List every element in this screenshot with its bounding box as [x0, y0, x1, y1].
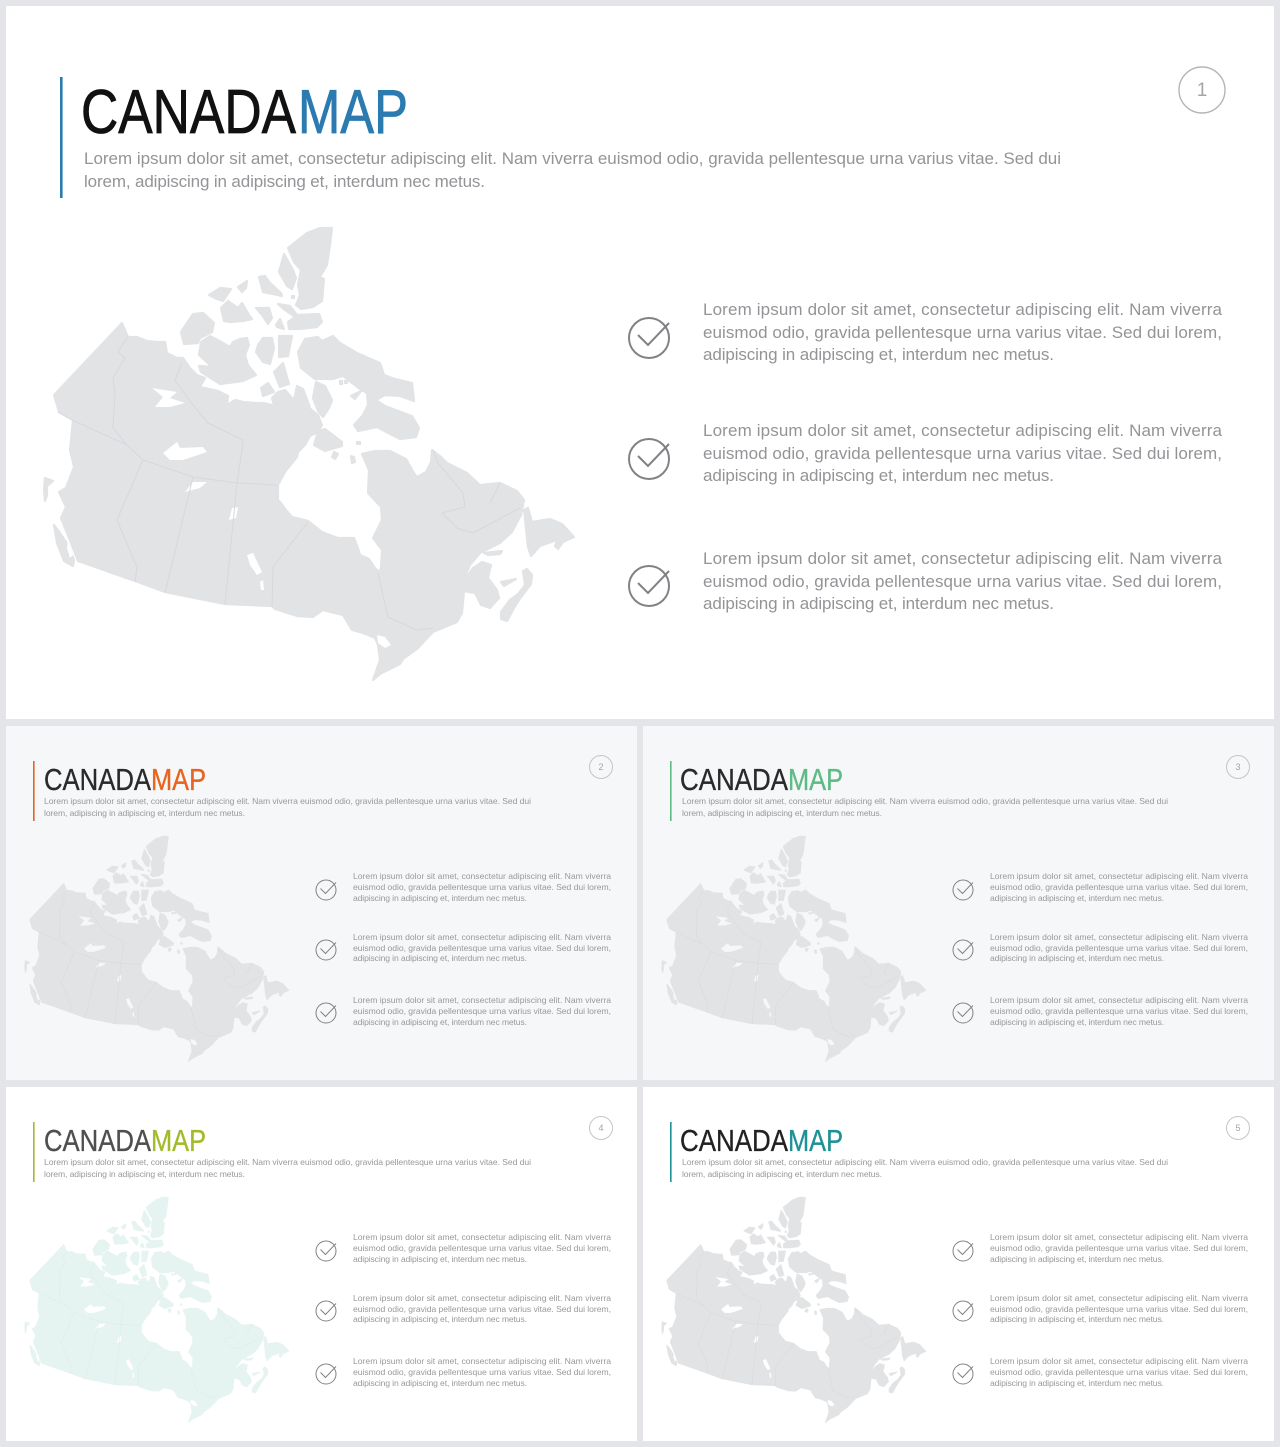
icon: check [316, 1003, 336, 1023]
text block: euismod odio, gravida pellentesque urna varius vitae. Sed dui lorem, [353, 1006, 611, 1016]
map of Canada [25, 836, 289, 1061]
page number badge [1226, 1116, 1250, 1140]
text block: adipiscing in adipiscing et, interdum nec metus. [353, 893, 527, 903]
text block: euismod odio, gravida pellentesque urna varius vitae. Sed dui lorem, [990, 943, 1248, 953]
icon: check [953, 880, 973, 900]
title: CANADA [680, 1123, 788, 1158]
icon: check 2 [629, 439, 669, 479]
text block 3: adipiscing in adipiscing et, interdum nec metus. [703, 594, 1054, 613]
title: CANADA [680, 762, 788, 797]
text block: Lorem ipsum dolor sit amet, consectetur adipiscing elit. Nam viverra [990, 1232, 1248, 1242]
title: CANADA [44, 1123, 151, 1158]
text block: Lorem ipsum dolor sit amet, consectetur adipiscing elit. Nam viverra [353, 1356, 611, 1366]
text block: euismod odio, gravida pellentesque urna varius vitae. Sed dui lorem, [353, 943, 611, 953]
intro text: Lorem ipsum dolor sit amet, consectetur adipiscing elit. Nam viverra euismod odio, gravida pellentesque urna varius vitae. Sed dui [682, 796, 1168, 806]
text block [353, 1293, 611, 1324]
text block 3: Lorem ipsum dolor sit amet, consectetur adipiscing elit. Nam viverra [703, 549, 1223, 568]
page number badge [1226, 756, 1250, 778]
text block: Lorem ipsum dolor sit amet, consectetur adipiscing elit. Nam viverra [990, 932, 1248, 942]
text block: euismod odio, gravida pellentesque urna varius vitae. Sed dui lorem, [990, 1006, 1248, 1016]
title: CANADA [44, 762, 151, 797]
text block 1 [703, 300, 1223, 364]
title: CANADA [81, 78, 297, 147]
text block: Lorem ipsum dolor sit amet, consectetur adipiscing elit. Nam viverra [990, 871, 1248, 881]
intro text: lorem, adipiscing in adipiscing et, interdum nec metus. [682, 1169, 882, 1179]
text block 2 [703, 421, 1223, 485]
icon: check [953, 1003, 973, 1023]
accent bar [33, 761, 35, 821]
text block: adipiscing in adipiscing et, interdum nec metus. [990, 1378, 1164, 1388]
text block 1: adipiscing in adipiscing et, interdum nec metus. [703, 345, 1054, 364]
text block [353, 932, 611, 963]
text block: adipiscing in adipiscing et, interdum nec metus. [990, 953, 1164, 963]
icon: check [953, 1301, 973, 1321]
text block: Lorem ipsum dolor sit amet, consectetur adipiscing elit. Nam viverra [353, 1293, 611, 1303]
text block: adipiscing in adipiscing et, interdum nec metus. [990, 1017, 1164, 1027]
map of Canada [44, 228, 574, 680]
text block: adipiscing in adipiscing et, interdum nec metus. [353, 1314, 527, 1324]
map of Canada [25, 1197, 289, 1422]
text block: adipiscing in adipiscing et, interdum nec metus. [353, 1017, 527, 1027]
page number badge: 1 [1197, 80, 1207, 101]
text block: adipiscing in adipiscing et, interdum nec metus. [990, 893, 1164, 903]
text block: adipiscing in adipiscing et, interdum nec metus. [990, 1314, 1164, 1324]
panel: slide 3 green [643, 726, 1274, 1080]
text block [990, 932, 1248, 963]
page number badge [590, 1116, 612, 1140]
icon: check [953, 1241, 973, 1261]
accent bar [33, 1122, 35, 1182]
text block: adipiscing in adipiscing et, interdum nec metus. [353, 953, 527, 963]
map of Canada [662, 1197, 926, 1422]
icon: check [316, 880, 336, 900]
icon: check [316, 940, 336, 960]
icon: check [953, 1364, 973, 1384]
text block: euismod odio, gravida pellentesque urna varius vitae. Sed dui lorem, [353, 882, 611, 892]
page number badge [590, 756, 612, 778]
panel: slide 2 orange [6, 726, 637, 1080]
title: MAP [788, 1123, 843, 1158]
text block [990, 871, 1248, 903]
text block: euismod odio, gravida pellentesque urna varius vitae. Sed dui lorem, [353, 1243, 611, 1253]
panel: slide 4 olive [6, 1087, 637, 1441]
icon: check [316, 1241, 336, 1261]
intro text [84, 149, 1061, 191]
text block 2: adipiscing in adipiscing et, interdum nec metus. [703, 466, 1054, 485]
page number badge: 3 [1235, 762, 1241, 772]
text block [353, 995, 611, 1027]
page number badge: 4 [598, 1123, 604, 1133]
intro text: Lorem ipsum dolor sit amet, consectetur adipiscing elit. Nam viverra euismod odio, gravida pellentesque urna varius vitae. Sed dui [84, 149, 1061, 168]
panel: main slide 1 [6, 6, 1274, 719]
text block: Lorem ipsum dolor sit amet, consectetur adipiscing elit. Nam viverra [353, 871, 611, 881]
text block: euismod odio, gravida pellentesque urna varius vitae. Sed dui lorem, [990, 1367, 1248, 1377]
text block: adipiscing in adipiscing et, interdum nec metus. [990, 1254, 1164, 1264]
intro text: lorem, adipiscing in adipiscing et, interdum nec metus. [44, 1169, 245, 1179]
text block: Lorem ipsum dolor sit amet, consectetur adipiscing elit. Nam viverra [353, 1232, 611, 1242]
intro text [682, 796, 1168, 818]
text block 2: Lorem ipsum dolor sit amet, consectetur adipiscing elit. Nam viverra [703, 421, 1223, 440]
icon: check [953, 940, 973, 960]
intro text [682, 1157, 1168, 1179]
page number badge [1179, 67, 1225, 113]
panel: slide 5 teal [643, 1087, 1274, 1441]
text block: Lorem ipsum dolor sit amet, consectetur adipiscing elit. Nam viverra [353, 932, 611, 942]
page number badge: 2 [598, 762, 604, 772]
text block: adipiscing in adipiscing et, interdum nec metus. [353, 1378, 527, 1388]
intro text: lorem, adipiscing in adipiscing et, interdum nec metus. [682, 808, 882, 818]
text block: Lorem ipsum dolor sit amet, consectetur adipiscing elit. Nam viverra [990, 995, 1248, 1005]
intro text: Lorem ipsum dolor sit amet, consectetur adipiscing elit. Nam viverra euismod odio, gravida pellentesque urna varius vitae. Sed dui [682, 1157, 1168, 1167]
text block: euismod odio, gravida pellentesque urna varius vitae. Sed dui lorem, [353, 1304, 611, 1314]
text block [990, 995, 1248, 1027]
text block [990, 1232, 1248, 1264]
intro text: Lorem ipsum dolor sit amet, consectetur adipiscing elit. Nam viverra euismod odio, gravida pellentesque urna varius vitae. Sed dui [44, 796, 531, 806]
accent bar [60, 77, 63, 198]
text block: euismod odio, gravida pellentesque urna varius vitae. Sed dui lorem, [990, 882, 1248, 892]
icon: check [316, 1364, 336, 1384]
text block: Lorem ipsum dolor sit amet, consectetur adipiscing elit. Nam viverra [990, 1293, 1248, 1303]
text block: euismod odio, gravida pellentesque urna varius vitae. Sed dui lorem, [990, 1304, 1248, 1314]
text block [353, 1232, 611, 1264]
intro text: Lorem ipsum dolor sit amet, consectetur adipiscing elit. Nam viverra euismod odio, gravida pellentesque urna varius vitae. Sed dui [44, 1157, 531, 1167]
text block 3: euismod odio, gravida pellentesque urna varius vitae. Sed dui lorem, [703, 572, 1222, 591]
intro text [44, 796, 531, 818]
text block: Lorem ipsum dolor sit amet, consectetur adipiscing elit. Nam viverra [353, 995, 611, 1005]
intro text: lorem, adipiscing in adipiscing et, interdum nec metus. [44, 808, 245, 818]
title: MAP [788, 762, 843, 797]
text block: euismod odio, gravida pellentesque urna varius vitae. Sed dui lorem, [353, 1367, 611, 1377]
title: MAP [298, 78, 408, 147]
text block [353, 1356, 611, 1388]
accent bar [670, 1122, 672, 1182]
text block [990, 1356, 1248, 1388]
text block: adipiscing in adipiscing et, interdum nec metus. [353, 1254, 527, 1264]
text block 2: euismod odio, gravida pellentesque urna varius vitae. Sed dui lorem, [703, 444, 1222, 463]
page number badge: 5 [1235, 1123, 1241, 1133]
text block 1: euismod odio, gravida pellentesque urna varius vitae. Sed dui lorem, [703, 323, 1222, 342]
text block: Lorem ipsum dolor sit amet, consectetur adipiscing elit. Nam viverra [990, 1356, 1248, 1366]
title: MAP [151, 1123, 206, 1158]
title: MAP [151, 762, 206, 797]
text block 3 [703, 549, 1223, 613]
intro text: lorem, adipiscing in adipiscing et, interdum nec metus. [84, 172, 485, 191]
icon: check 3 [629, 566, 669, 606]
intro text [44, 1157, 531, 1179]
icon: check [316, 1301, 336, 1321]
icon: check 1 [629, 318, 669, 358]
text block 1: Lorem ipsum dolor sit amet, consectetur adipiscing elit. Nam viverra [703, 300, 1223, 319]
text block: euismod odio, gravida pellentesque urna varius vitae. Sed dui lorem, [990, 1243, 1248, 1253]
text block [353, 871, 611, 903]
accent bar [670, 761, 672, 821]
text block [990, 1293, 1248, 1324]
map of Canada [662, 836, 926, 1061]
